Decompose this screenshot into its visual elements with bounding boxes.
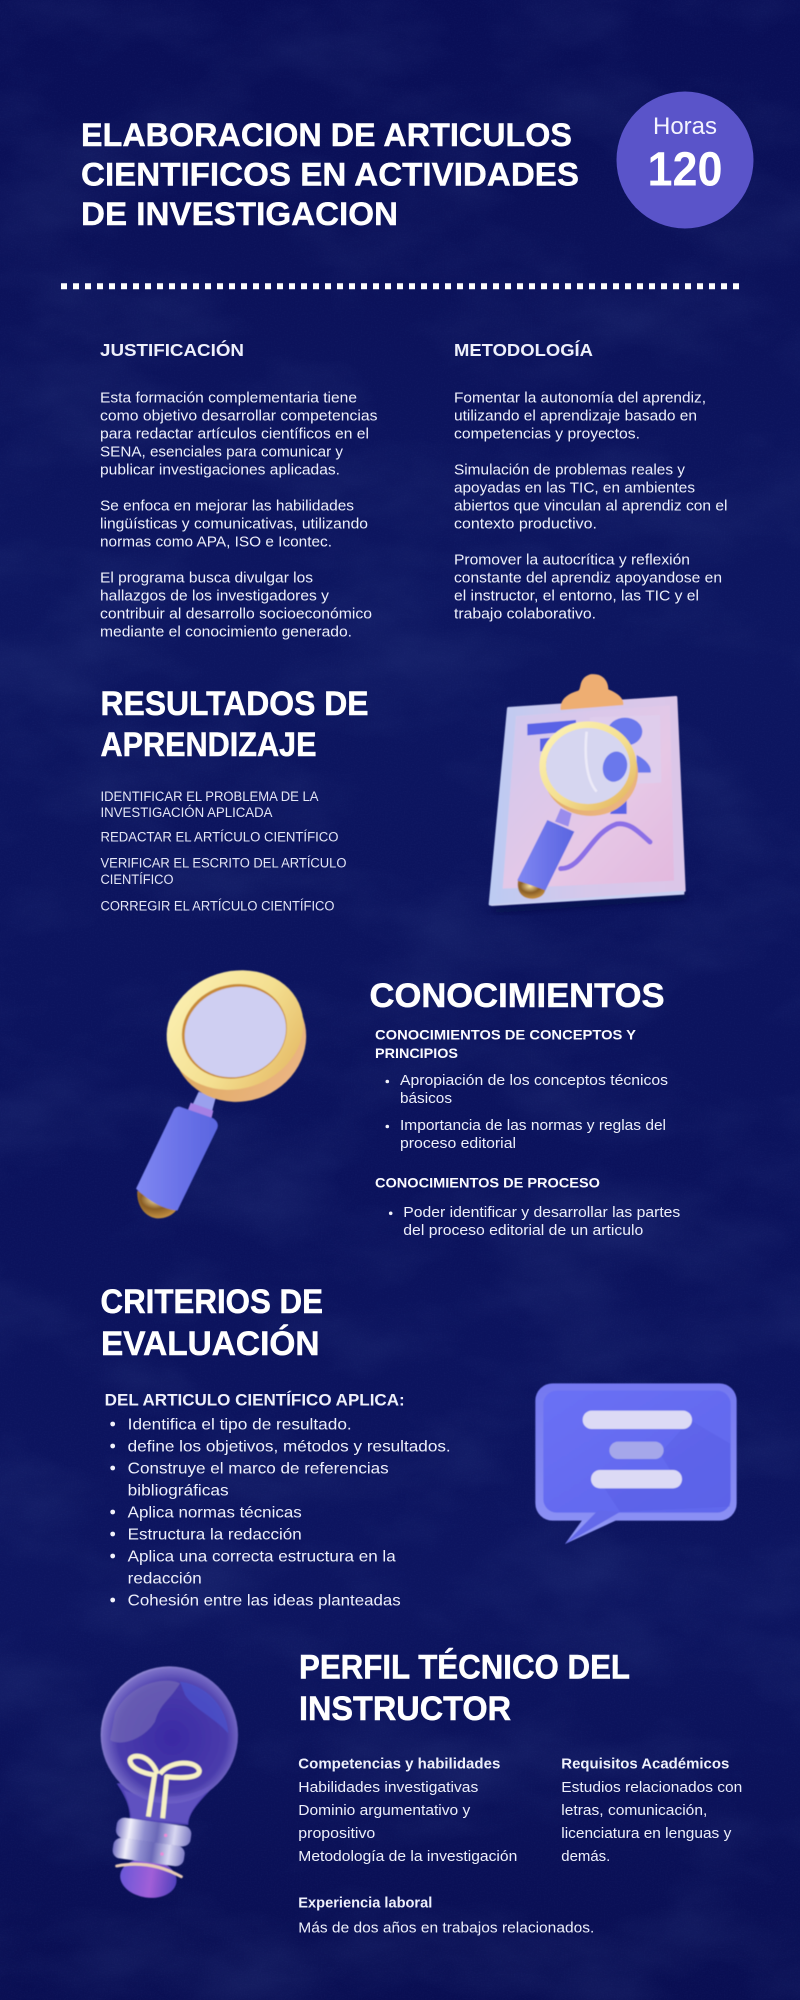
- heading: resultados de aprendizaje: APRENDIZAJE: [100, 726, 316, 764]
- list: criterios: redacción: [128, 1570, 202, 1587]
- text block: metodología: trabajo colaborativo.: [454, 606, 596, 622]
- text block: metodología: [454, 390, 728, 622]
- hours badge: 120: [648, 144, 722, 196]
- panel: criterios de evaluación: [100, 1283, 451, 1609]
- block: conocimientos de proceso: del proceso editorial de un articulo: [403, 1222, 643, 1239]
- list: criterios: [110, 1416, 451, 1609]
- panel: metodología: [454, 339, 728, 622]
- heading: criterios de evaluación: CRITERIOS DE: [100, 1283, 323, 1321]
- text block: metodología: apoyadas en las TIC, en ambientes: [454, 480, 695, 496]
- list: resultados: INVESTIGACIÓN APLICADA: [100, 805, 272, 820]
- list: resultados: CIENTÍFICO: [100, 872, 174, 887]
- subheading: del articulo científico: DEL ARTICULO CIENTÍFICO APLICA:: [105, 1391, 405, 1410]
- block: conceptos y principios: CONOCIMIENTOS DE CONCEPTOS Y: [375, 1026, 637, 1042]
- block: competencias y habilidades: propositivo: [298, 1825, 375, 1842]
- text block: metodología: utilizando el aprendizaje basado en: [454, 408, 697, 424]
- block: competencias y habilidades: [298, 1756, 517, 1865]
- hours badge: Horas: [653, 113, 717, 140]
- list: resultados: VERIFICAR EL ESCRITO DEL ARTÍCULO: [100, 856, 346, 871]
- text block: justificación: normas como APA, ISO e Icontec.: [100, 534, 332, 550]
- block: requisitos académicos: demás.: [561, 1848, 610, 1865]
- list: resultados: [100, 789, 346, 914]
- icon: clipboard with magnifier: [490, 674, 687, 913]
- heading: criterios de evaluación: [100, 1283, 323, 1363]
- title: DE INVESTIGACION: [81, 196, 398, 232]
- hours badge: [616, 92, 754, 228]
- panel: perfil técnico del instructor: [298, 1648, 742, 1937]
- block: competencias y habilidades: Metodología de la investigación: [298, 1848, 517, 1865]
- icon: speech bubble: [535, 1383, 737, 1544]
- list: resultados: CORREGIR EL ARTÍCULO CIENTÍFICO: [100, 899, 334, 914]
- panel: justificación: [100, 339, 378, 640]
- text block: metodología: constante del aprendiz apoyandose en: [454, 570, 722, 586]
- list: criterios: Cohesión entre las ideas planteadas: [128, 1592, 401, 1609]
- list: resultados: REDACTAR EL ARTÍCULO CIENTÍFICO: [100, 830, 338, 845]
- heading: criterios de evaluación: EVALUACIÓN: [101, 1325, 320, 1363]
- text block: justificación: mediante el conocimiento generado.: [100, 624, 352, 640]
- list: criterios: Construye el marco de referencias: [128, 1460, 389, 1477]
- list: resultados: IDENTIFICAR EL PROBLEMA DE LA: [100, 789, 318, 804]
- text block: metodología: contexto productivo.: [454, 516, 597, 532]
- block: requisitos académicos: [561, 1756, 742, 1865]
- title: CIENTIFICOS EN ACTIVIDADES: [81, 156, 579, 192]
- block: conceptos y principios: [375, 1026, 668, 1152]
- block: requisitos académicos: licenciatura en lenguas y: [561, 1825, 732, 1842]
- heading: conocimientos: CONOCIMIENTOS: [370, 977, 664, 1015]
- text block: justificación: El programa busca divulgar los: [100, 570, 313, 586]
- text block: justificación: para redactar artículos científicos en el: [100, 426, 369, 442]
- text block: metodología: el instructor, el entorno, las TIC y el: [454, 588, 699, 604]
- icon: magnifying glass: [136, 953, 323, 1218]
- block: requisitos académicos: Requisitos Académicos: [561, 1756, 729, 1773]
- block: competencias y habilidades: Dominio argumentativo y: [298, 1802, 471, 1819]
- text block: metodología: Simulación de problemas reales y: [454, 462, 685, 478]
- text block: justificación: contribuir al desarrollo socioeconómico: [100, 606, 372, 622]
- heading: justificación: JUSTIFICACIÓN: [100, 339, 244, 360]
- block: requisitos académicos: Estudios relacionados con: [561, 1779, 742, 1796]
- text block: justificación: publicar investigaciones aplicadas.: [100, 462, 340, 478]
- list: criterios: Estructura la redacción: [128, 1526, 302, 1543]
- title: [81, 117, 579, 232]
- list: criterios: Aplica una correcta estructura en la: [128, 1548, 396, 1565]
- block: conceptos y principios: Importancia de las normas y reglas del: [400, 1117, 666, 1134]
- list: criterios: Aplica normas técnicas: [128, 1504, 302, 1521]
- text block: justificación: hallazgos de los investigadores y: [100, 588, 330, 604]
- text block: metodología: competencias y proyectos.: [454, 426, 640, 442]
- block: conocimientos de proceso: CONOCIMIENTOS DE PROCESO: [375, 1175, 600, 1191]
- heading: perfil técnico: [299, 1648, 630, 1728]
- text block: justificación: lingüísticas y comunicativas, utilizando: [100, 516, 368, 532]
- text block: justificación: [100, 390, 378, 640]
- panel: resultados de aprendizaje: [100, 685, 368, 914]
- block: conceptos y principios: Apropiación de los conceptos técnicos: [400, 1072, 668, 1089]
- block: experiencia laboral: [298, 1895, 594, 1937]
- text block: justificación: Se enfoca en mejorar las habilidades: [100, 498, 354, 514]
- block: requisitos académicos: letras, comunicación,: [561, 1802, 707, 1819]
- block: competencias y habilidades: Habilidades investigativas: [298, 1779, 478, 1796]
- list: criterios: Identifica el tipo de resultado.: [128, 1416, 352, 1433]
- block: conceptos y principios: proceso editorial: [400, 1135, 516, 1152]
- block: conceptos y principios: PRINCIPIOS: [375, 1045, 458, 1061]
- list: criterios: define los objetivos, métodos y resultados.: [128, 1438, 451, 1455]
- heading: resultados de aprendizaje: RESULTADOS DE: [100, 685, 368, 723]
- text block: metodología: abiertos que vinculan al aprendiz con el: [454, 498, 728, 514]
- panel: conocimientos: [370, 977, 680, 1239]
- heading: resultados de aprendizaje: [100, 685, 368, 764]
- block: experiencia laboral: Más de dos años en trabajos relacionados.: [298, 1920, 594, 1937]
- text block: justificación: Esta formación complementaria tiene: [100, 390, 357, 406]
- block: competencias y habilidades: Competencias y habilidades: [298, 1756, 500, 1773]
- icon: light bulb: [101, 1666, 238, 1901]
- block: experiencia laboral: Experiencia laboral: [298, 1895, 432, 1912]
- title: ELABORACION DE ARTICULOS: [81, 117, 572, 153]
- block: conceptos y principios: básicos: [400, 1090, 452, 1107]
- text block: metodología: Fomentar la autonomía del aprendiz,: [454, 390, 706, 406]
- text block: justificación: como objetivo desarrollar competencias: [100, 408, 378, 424]
- text block: metodología: Promover la autocrítica y reflexión: [454, 552, 690, 568]
- block: conocimientos de proceso: [375, 1175, 680, 1239]
- heading: metodología: METODOLOGÍA: [454, 339, 593, 360]
- heading: perfil técnico: INSTRUCTOR: [299, 1690, 511, 1728]
- list: criterios: bibliográficas: [128, 1482, 229, 1499]
- block: conocimientos de proceso: Poder identificar y desarrollar las partes: [403, 1204, 680, 1221]
- text block: justificación: SENA, esenciales para comunicar y: [100, 444, 344, 460]
- heading: perfil técnico: PERFIL TÉCNICO DEL: [299, 1648, 630, 1686]
